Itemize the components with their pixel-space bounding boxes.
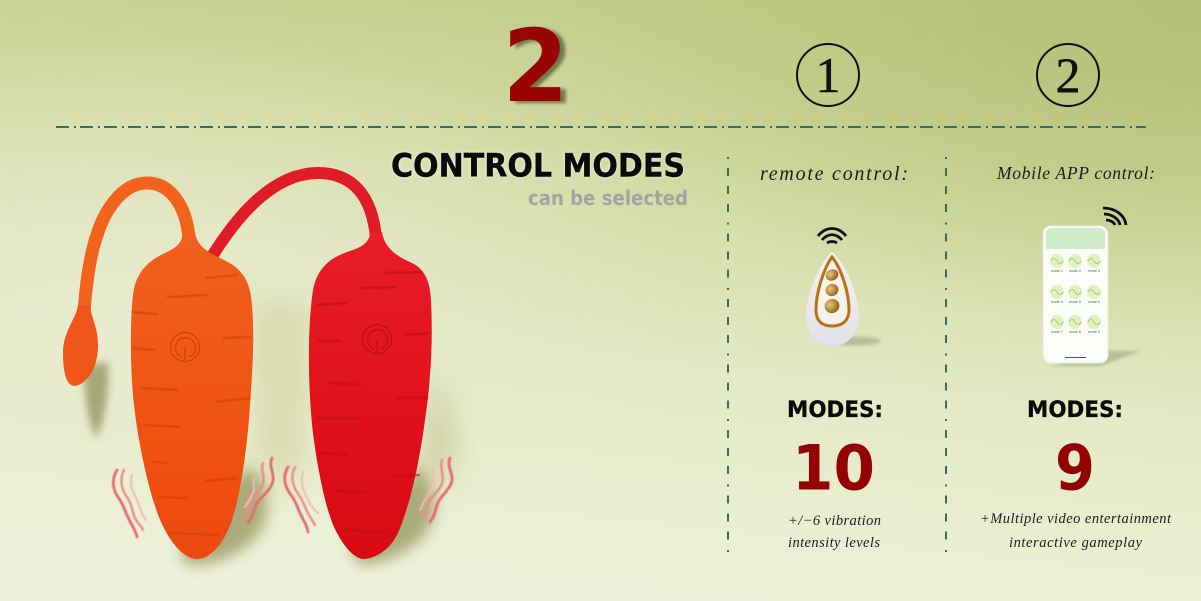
- vertical divider left: [727, 157, 729, 556]
- icon: phone app: mode 8: [1069, 330, 1081, 334]
- orange carrot product: [63, 183, 253, 559]
- icon: wifi beside phone: [1103, 208, 1126, 225]
- orange carrot ridges: [132, 275, 250, 535]
- vertical divider right: [945, 157, 947, 556]
- red power icon: [362, 324, 392, 354]
- note left: intensity levels: [788, 535, 880, 551]
- icon: phone app: [1043, 226, 1141, 366]
- shadows of products: [84, 300, 455, 566]
- modes label right: MODES:: [1027, 398, 1123, 423]
- vibration waves: left of orange: [113, 470, 146, 537]
- number 9: 9: [1055, 432, 1095, 504]
- vibration waves: right of red: [420, 458, 452, 522]
- note right: [980, 511, 1172, 551]
- label: remote control: remote control:: [760, 163, 908, 185]
- circled number 2: [1037, 44, 1099, 106]
- subheading: can be selected: [528, 186, 688, 210]
- icon: wifi above remote: [818, 228, 846, 243]
- circled number 2: 2: [1056, 47, 1080, 103]
- heading: control modes: CONTROL MODES: [391, 146, 685, 184]
- label: mobile app control: Mobile APP control:: [996, 163, 1155, 183]
- icon: phone app: mode 4: [1051, 300, 1063, 304]
- modes label left: MODES:: [787, 398, 883, 423]
- vibration waves: right of orange: [243, 458, 273, 523]
- red carrot ridges: [317, 272, 430, 532]
- icon: phone app: mode 6: [1088, 300, 1100, 304]
- note left: +/−6 vibration: [788, 513, 881, 529]
- icon: phone app: mode 5: [1069, 300, 1081, 304]
- note right: interactive gameplay: [1009, 535, 1143, 551]
- horizontal divider: [56, 126, 1146, 128]
- icon: phone app: mode 3: [1088, 269, 1100, 273]
- big number 2: 2: [508, 10, 574, 127]
- big number 2: 2: [502, 8, 568, 125]
- number 10: 10: [792, 432, 875, 504]
- note right: +Multiple video entertainment: [980, 511, 1172, 527]
- icon: phone app: mode 7: [1051, 330, 1063, 334]
- icon: phone app: mode 2: [1069, 269, 1081, 273]
- icon: phone app: mode 9: [1088, 330, 1100, 334]
- orange power icon: [170, 332, 200, 362]
- heading: control modes: CONTROL MODES: [391, 146, 685, 184]
- red carrot product: [205, 173, 432, 559]
- icon: phone app: mode 1: [1051, 269, 1063, 273]
- vibration waves: left of red: [285, 467, 318, 532]
- circled number 1: 1: [816, 47, 840, 103]
- circled number 1: [797, 44, 859, 106]
- icon: remote control: [806, 252, 881, 346]
- note left: [788, 513, 881, 551]
